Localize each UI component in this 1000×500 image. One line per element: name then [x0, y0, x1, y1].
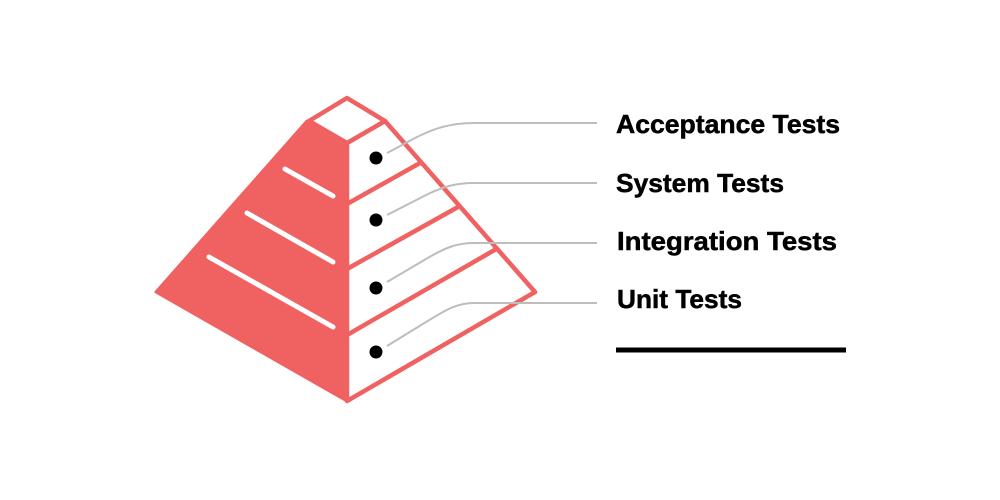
label: unit tests: Unit Tests	[617, 284, 742, 314]
black rule	[616, 348, 846, 352]
pyramid right face outline	[347, 121, 535, 401]
labels	[616, 109, 840, 314]
leader lines	[387, 123, 597, 346]
pyramid top cap	[309, 98, 385, 143]
pyramid left face	[156, 121, 347, 401]
tier dots	[370, 152, 382, 358]
tier dividers	[347, 163, 498, 335]
label: acceptance tests: Acceptance Tests	[616, 109, 840, 139]
pyramid diagram	[156, 98, 535, 401]
label: system tests: System Tests	[616, 168, 784, 198]
label: integration tests: Integration Tests	[617, 226, 837, 256]
left face white bars	[209, 169, 333, 327]
